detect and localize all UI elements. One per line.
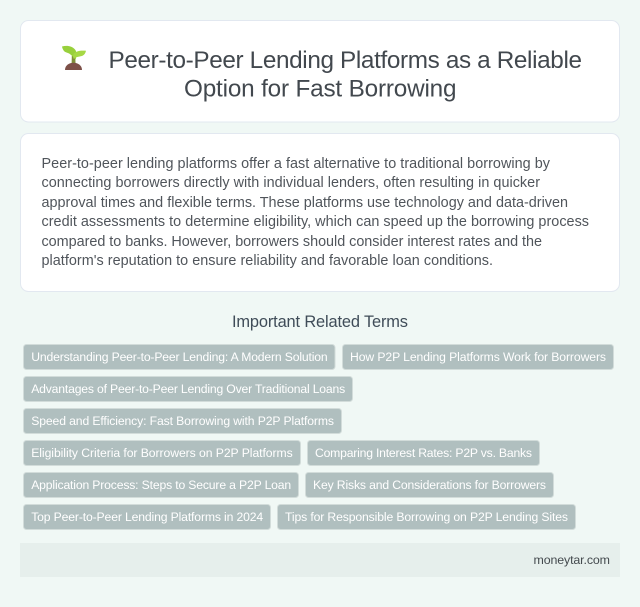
chip: [24, 472, 298, 498]
text block: description: compared to banks. However, borrowers should consider interest rates and the: [42, 234, 542, 250]
chip: [24, 344, 335, 370]
icon: seedling: [62, 46, 86, 70]
footer source text: moneytar.com: [534, 553, 610, 567]
chip: [306, 472, 554, 498]
text block: description: credit assessments to determine eligibility, which can speed up the borrowing process: [42, 214, 589, 230]
title: Option for Fast Borrowing: [184, 76, 456, 102]
footer: [20, 543, 620, 577]
chip: Application Process: Steps to Secure a P2P Loan: [31, 478, 291, 492]
chip: [24, 440, 300, 466]
text block: description: approval times and flexible terms. These platforms use technology and data-driven: [42, 195, 568, 211]
title: Peer-to-Peer Lending Platforms as a Reliable: [108, 47, 582, 74]
heading: important related terms: Important Related Terms: [232, 313, 408, 331]
chip: [342, 344, 614, 370]
chip: [308, 440, 540, 466]
chip: Advantages of Peer-to-Peer Lending Over Traditional Loans: [31, 382, 345, 396]
text block: description: Peer-to-peer lending platforms offer a fast alternative to traditional borrowing by: [42, 156, 551, 172]
text block: description: [42, 156, 589, 269]
panel: description card: [20, 134, 620, 292]
title: [108, 47, 582, 102]
chip: [24, 408, 342, 434]
chip: [278, 504, 576, 530]
text block: description: connecting borrowers directly with individual lenders, often resulting in quicker: [42, 175, 540, 191]
chip: Key Risks and Considerations for Borrowers: [313, 478, 546, 492]
panel: title card: [20, 20, 620, 122]
chip: Speed and Efficiency: Fast Borrowing with P2P Platforms: [31, 414, 334, 428]
chip: Understanding Peer-to-Peer Lending: A Modern Solution: [31, 350, 328, 364]
chip: Top Peer-to-Peer Lending Platforms in 2024: [31, 510, 263, 524]
chip: [24, 376, 352, 402]
chip: [24, 504, 270, 530]
chip: Comparing Interest Rates: P2P vs. Banks: [315, 446, 532, 460]
chip: Tips for Responsible Borrowing on P2P Lending Sites: [285, 510, 568, 524]
panel: related terms chips: [24, 344, 614, 530]
chip: How P2P Lending Platforms Work for Borrowers: [350, 350, 606, 364]
text block: description: platform's reputation to ensure reliability and favorable loan conditions.: [42, 253, 493, 269]
chip: Eligibility Criteria for Borrowers on P2P Platforms: [31, 446, 293, 460]
